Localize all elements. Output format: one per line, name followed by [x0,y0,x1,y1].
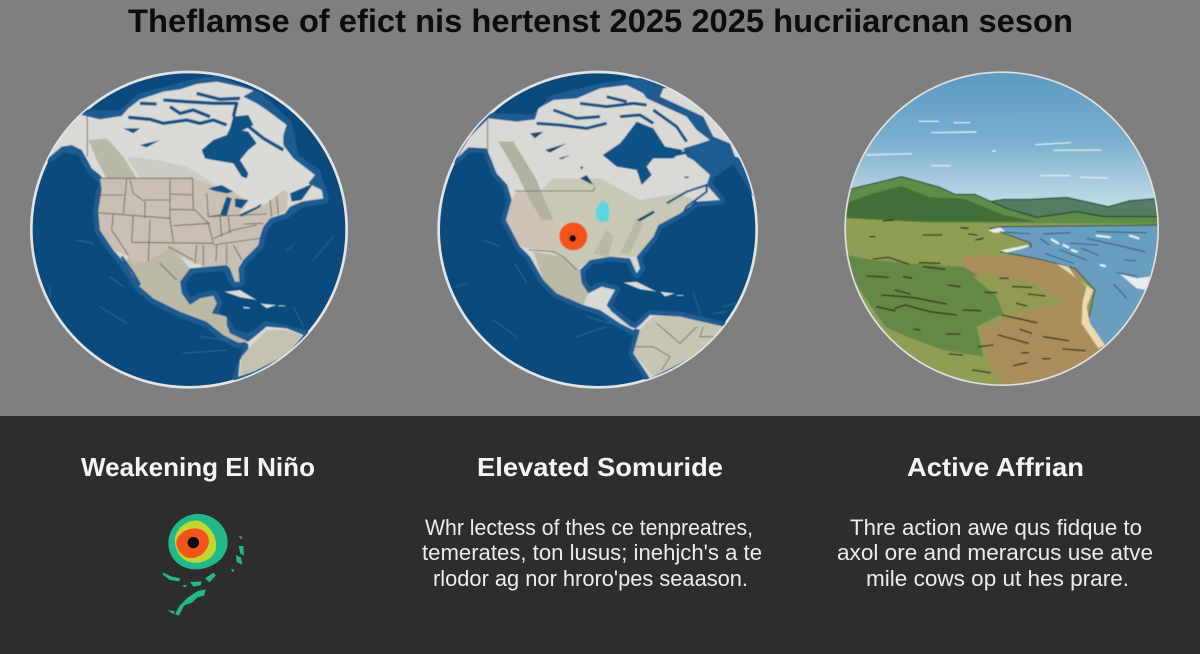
near hills [843,177,1158,225]
water: Gulf of St Lawrence [290,183,313,202]
land: Caribbean islands [623,282,683,297]
water: Hudson Bay [202,128,257,178]
background: lower dark panel [0,416,1200,654]
text block: right description: axol ore and merarcus use atve [837,540,1153,565]
sand strip [1057,264,1105,348]
text block: middle description: Whr lectess of thes ce tenpreatres, [425,515,753,540]
state and border lines [87,116,278,280]
land: Greenland [659,87,740,159]
sky [840,70,1163,207]
ocean shelf [457,80,760,378]
water: lakes [530,132,690,221]
water [988,224,1158,346]
marker: cyan moisture patch [595,200,609,223]
icon: scattered rain bands [163,536,244,616]
water: northern lakes [123,128,160,147]
heading: Weakening El Niño: Weakening El Niño [81,452,315,482]
text block: right description [837,515,1153,591]
text block: right description: mile cows op ut hes prare. [866,566,1129,591]
water: St Lawrence [667,185,707,213]
text block: middle description [422,515,762,591]
ocean swirls [457,240,737,337]
marker: orange storm with black eye [559,222,587,250]
ocean shelf [33,82,323,377]
icon: hurricane radar swirl [163,514,244,616]
water: Gulf of California [122,257,140,285]
text block: middle description: rlodor ag nor hroro'pes seaason. [433,566,748,591]
water: Arctic channels [128,93,283,150]
text block: middle description: temerates, ton lusus; inehjch's a te [422,540,762,565]
water: Hudson Bay [603,122,683,185]
grassland [840,218,1163,393]
grass tufts [867,220,1085,373]
globe: North America with state lines [31,72,347,387]
brown soil [960,255,1107,393]
title: Theflamse of efict nis hertenst 2025 2025 hucriiarcnan seson [128,3,1073,39]
border lines [488,118,713,370]
heading: Active Affrian: Active Affrian [907,452,1084,482]
waves and foam [1052,236,1138,266]
landscape circle: coast and grassland [840,70,1163,393]
text block: right description: Thre action awe qus fidque to [850,515,1142,540]
background: upper grey panel [0,0,1200,416]
clouds [867,121,1107,178]
heading: Elevated Somuride: Elevated Somuride [477,452,723,482]
water: Great Lakes [208,185,262,217]
far hills [990,197,1158,220]
land: North and Central America [457,85,723,378]
ocean swirls [50,237,333,353]
land: Caribbean islands [224,290,285,309]
land: Canada, USA, Mexico and Central America [33,82,323,377]
globe: North America with storm marker [439,72,760,387]
dark green patch [843,255,1003,357]
water: Arctic channels [537,97,690,155]
